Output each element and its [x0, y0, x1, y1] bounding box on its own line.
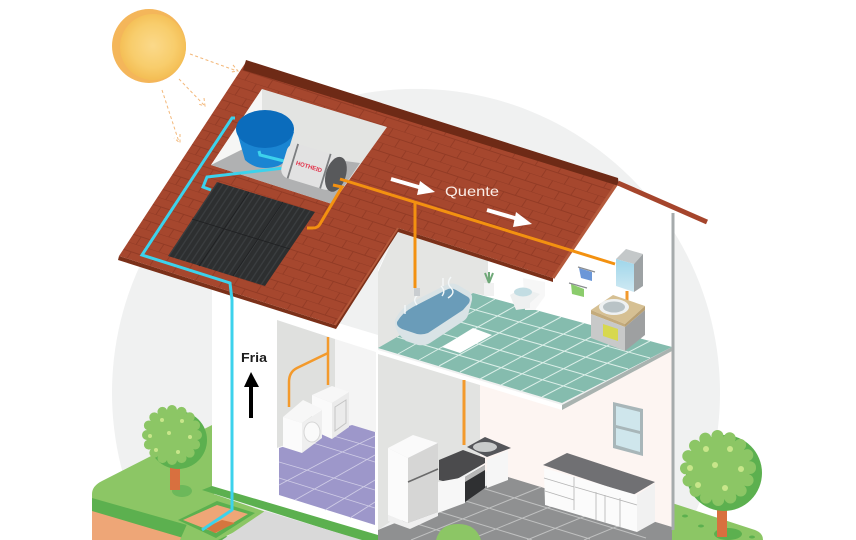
floor slab edge [378, 350, 562, 410]
lower room left wall [378, 352, 480, 530]
kitchen orange pipe [462, 380, 466, 445]
roof tiles [119, 62, 618, 325]
lawn front with inlet [180, 490, 272, 540]
stove and oven [438, 450, 485, 513]
towel green [569, 283, 587, 297]
arrow hot 2 [487, 210, 532, 227]
water inlet pit [178, 501, 255, 538]
water tank [236, 110, 294, 168]
bath mat [442, 328, 492, 353]
house wall: white front [212, 285, 378, 540]
ground: right lawn [672, 503, 763, 540]
laundry floor [279, 425, 375, 525]
eave overhang [618, 183, 707, 222]
roof opening [211, 89, 387, 204]
grey path [222, 511, 362, 540]
kitchen sink counter [467, 437, 511, 488]
dryer [312, 386, 349, 439]
laundry floor grout [279, 432, 375, 518]
bathroom wall cabinet [616, 249, 643, 292]
kitchen floor [378, 477, 672, 540]
hot water pipes [307, 179, 615, 288]
bathroom plant [484, 272, 494, 296]
sun rays [162, 54, 238, 143]
bathroom vanity [591, 295, 645, 351]
washing machine [283, 400, 322, 453]
arrow hot 1 [391, 179, 435, 195]
house right edge [672, 213, 674, 530]
inner valley edge [335, 228, 398, 325]
cold water pipes [142, 118, 284, 530]
refrigerator [388, 435, 438, 529]
towel blue [578, 267, 595, 281]
window [613, 402, 643, 456]
right tree [686, 435, 762, 540]
arrow cold [244, 372, 259, 418]
laundry room [277, 320, 376, 525]
solar panel [168, 182, 315, 286]
boiler brand: HOTHEID [295, 161, 323, 175]
bush at bottom [436, 524, 481, 540]
bottom walkway green strip [202, 486, 378, 540]
laundry wall grey [277, 320, 335, 448]
lower room right wall [480, 348, 672, 530]
bathroom floor [378, 293, 672, 410]
house wall: upper right [378, 182, 672, 348]
left tree [147, 410, 207, 497]
bathroom back wall [378, 228, 488, 348]
boiler cylinder [279, 141, 351, 194]
ridge [243, 60, 619, 186]
yellow towel [603, 324, 618, 341]
bathtub [395, 277, 472, 345]
orange pipe to cabinet sink [626, 291, 628, 301]
label Quente: Quente [445, 183, 499, 199]
kitchen island [543, 453, 655, 532]
roof [118, 60, 619, 329]
sun [112, 9, 186, 83]
roof right edge [553, 182, 618, 278]
laundry orange pipes [289, 337, 328, 407]
toilet [510, 278, 545, 310]
background circle [112, 89, 720, 540]
label Fria: Fria [241, 350, 268, 365]
laundry wall light [335, 339, 376, 432]
roof thickness edge [118, 228, 553, 329]
ground: left lawn [92, 424, 240, 540]
